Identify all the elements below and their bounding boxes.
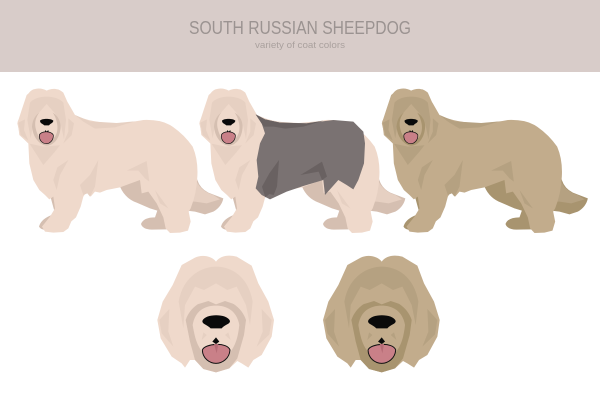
face portrait: cream coat xyxy=(157,256,274,372)
dog: tan coat xyxy=(382,88,588,233)
dog: cream coat with grey saddle xyxy=(199,88,405,233)
grey saddle xyxy=(256,114,365,199)
dog: cream coat xyxy=(17,88,223,233)
title: SOUTH RUSSIAN SHEEPDOG xyxy=(189,18,411,38)
subtitle: variety of coat colors xyxy=(255,40,345,51)
face portrait: tan coat xyxy=(323,256,440,372)
header banner xyxy=(0,0,600,72)
